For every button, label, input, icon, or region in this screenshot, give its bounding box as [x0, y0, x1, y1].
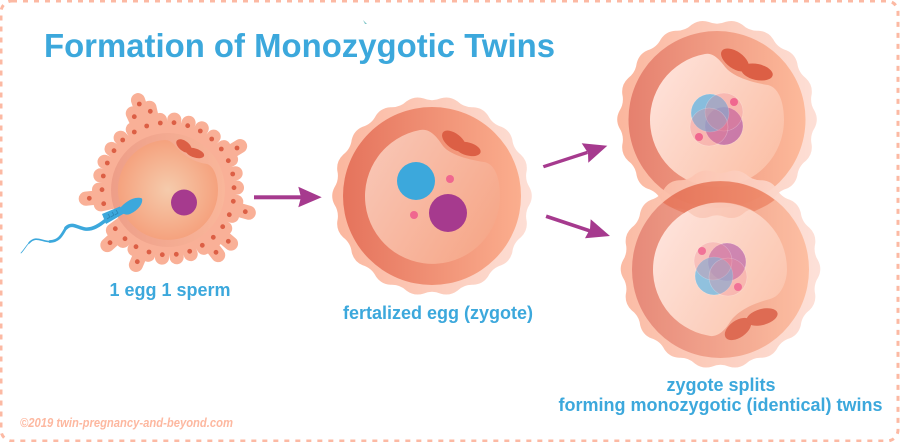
- upper twin showing through lower twin: [688, 202, 750, 218]
- twin overlap shading: [663, 181, 774, 213]
- label: forming monozygotic twins: forming monozygotic (identical) twins: [558, 395, 882, 415]
- label: fertalized egg: fertalized egg (zygote): [343, 303, 533, 323]
- label: zygote splits: zygote splits: [666, 375, 776, 395]
- sperm tail: [21, 219, 107, 253]
- sperm head: [120, 198, 142, 215]
- pink polar bodies: [410, 175, 454, 219]
- corona ring: [111, 133, 225, 247]
- sperm: [21, 198, 142, 253]
- label: 1 egg 1 sperm: 1 egg 1 sperm: [109, 280, 231, 300]
- egg cell: [118, 140, 218, 240]
- title: Formation of Monozygotic Twins: [44, 27, 555, 64]
- arrow: egg to zygote: [254, 187, 322, 207]
- upper twin outer membrane: [617, 21, 817, 218]
- lower twin ring: [632, 181, 809, 358]
- blue pronucleus: [397, 162, 435, 200]
- arrow: zygote to lower twin: [546, 214, 610, 238]
- zygote outer membrane: [332, 97, 532, 295]
- egg follicle cells: [86, 100, 249, 265]
- upper twin organelle: [717, 44, 774, 83]
- lower twin outer membrane: [621, 170, 820, 368]
- small teal speck: [363, 20, 367, 24]
- lower twin nuclei cluster: [694, 242, 747, 296]
- lower twin cell: [621, 170, 820, 368]
- cell nuclei: [87, 102, 248, 264]
- egg organelle: [174, 137, 205, 160]
- zygote: [332, 97, 532, 295]
- upper twin cell: [617, 21, 817, 218]
- copyright: ©2019 twin-pregnancy-and-beyond.com: [20, 415, 233, 430]
- lower twin organelle: [721, 305, 780, 345]
- sperm midpiece: [102, 206, 124, 224]
- upper twin nuclei cluster: [690, 93, 743, 146]
- zygote ring: [343, 107, 521, 285]
- upper twin cytoplasm: [650, 54, 784, 187]
- upper twin ring: [628, 31, 806, 208]
- arrow: zygote to upper twin: [543, 143, 607, 168]
- zygote organelle: [438, 126, 482, 159]
- lower twin cytoplasm: [653, 203, 787, 336]
- egg with sperm illustration: [21, 100, 249, 265]
- egg nucleus: [171, 190, 197, 216]
- purple pronucleus: [429, 194, 467, 232]
- zygote cytoplasm: [365, 130, 500, 264]
